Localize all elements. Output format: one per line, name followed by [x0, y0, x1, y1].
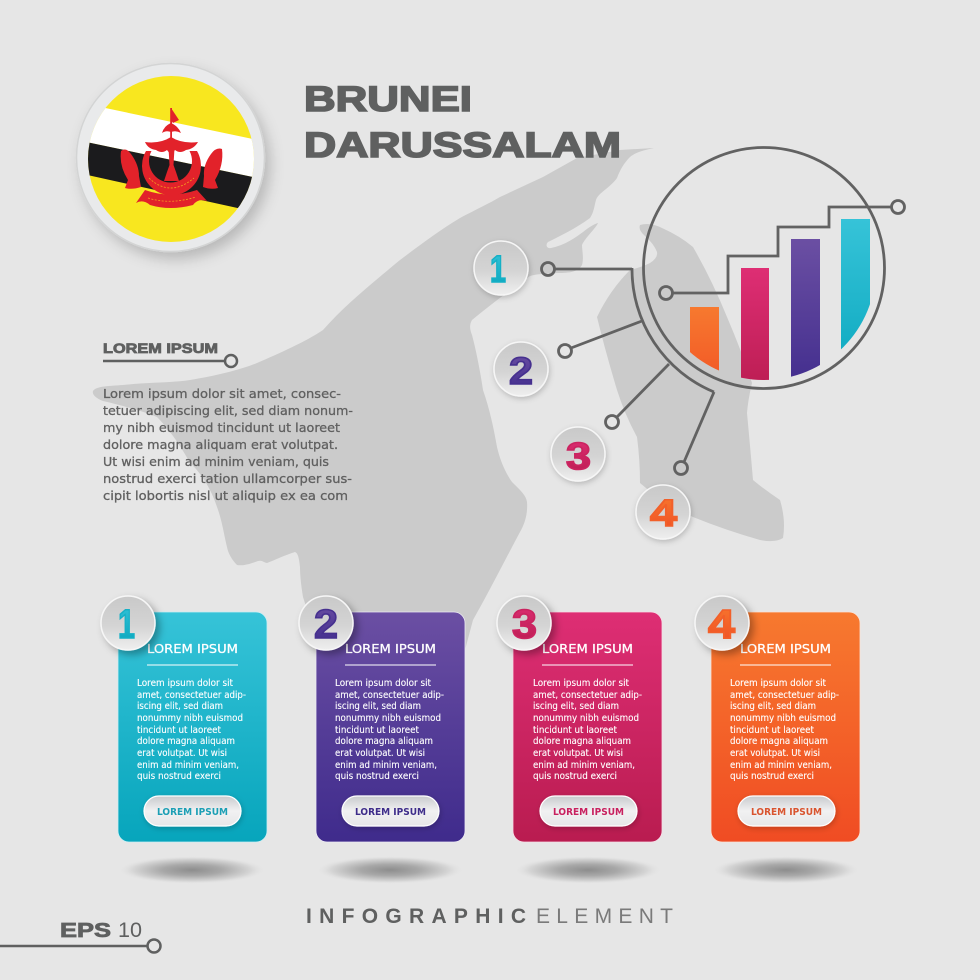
map: Brunei silhouette	[93, 148, 784, 650]
card text: tincidunt ut laoreet	[533, 725, 617, 736]
emblem	[121, 108, 222, 208]
card text: nonummy nibh euismod	[730, 713, 836, 724]
card text: amet, consectetuer adip-	[533, 690, 642, 701]
card text: quis nostrud exerci	[533, 771, 617, 782]
card number badge	[101, 596, 155, 650]
text block: left: dolore magna aliquam erat volutpat.	[103, 438, 338, 453]
flag ring	[76, 64, 264, 252]
card text: Lorem ipsum dolor sit	[533, 678, 629, 689]
card shadow	[118, 856, 266, 884]
card shadow	[712, 856, 860, 884]
card text: dolore magna aliquam	[335, 736, 433, 747]
card text: erat volutpat. Ut wisi	[137, 748, 227, 759]
info heading: left	[103, 340, 237, 367]
card text: quis nostrud exerci	[335, 771, 419, 782]
text block: left: tetuer adipiscing elit, sed diam nonum-	[103, 404, 353, 419]
card button	[144, 796, 241, 826]
footer: infographic element	[306, 905, 673, 928]
card text: tincidunt ut laoreet	[730, 725, 814, 736]
card text: erat volutpat. Ut wisi	[335, 748, 425, 759]
text block: left: cipit lobortis nisl ut aliquip ex ea com	[103, 489, 348, 504]
title: BRUNEI	[304, 80, 472, 119]
card button	[738, 796, 835, 826]
text block: left: nostrud exerci tation ullamcorper sus-	[103, 472, 352, 487]
footer: infographic element: ELEMENT	[536, 905, 673, 928]
card text	[533, 678, 642, 782]
panel: card 3	[497, 596, 662, 884]
card text: iscing elit, sed diam	[730, 701, 816, 712]
card text: Lorem ipsum dolor sit	[335, 678, 431, 689]
card number badge	[695, 596, 749, 650]
card text: dolore magna aliquam	[137, 736, 235, 747]
connector lines	[542, 262, 714, 474]
map badge 4: 4	[650, 493, 677, 535]
card text: Lorem ipsum dolor sit	[730, 678, 826, 689]
card button: LOREM IPSUM	[751, 807, 822, 818]
text block: left	[103, 387, 353, 504]
card number badge	[497, 596, 551, 650]
lens outer arc	[632, 268, 714, 392]
card text: enim ad minim veniam,	[335, 760, 437, 771]
card text: nonummy nibh euismod	[533, 713, 639, 724]
title: DARUSSALAM	[304, 126, 621, 165]
card text: enim ad minim veniam,	[730, 760, 832, 771]
card text: nonummy nibh euismod	[137, 713, 243, 724]
card shadow	[316, 856, 464, 884]
magnifier with bar chart	[632, 148, 904, 407]
card heading: LOREM IPSUM	[345, 642, 436, 656]
stepped trend line	[660, 200, 904, 300]
card text: Lorem ipsum dolor sit	[137, 678, 233, 689]
title	[304, 80, 621, 165]
flag badge	[60, 64, 280, 252]
text block: left: Ut wisi enim ad minim veniam, quis	[103, 455, 329, 470]
card heading: LOREM IPSUM	[542, 642, 633, 656]
footer: infographic element: INFOGRAPHIC	[306, 905, 526, 928]
card text: tincidunt ut laoreet	[137, 725, 221, 736]
card text: erat volutpat. Ut wisi	[730, 748, 820, 759]
card text: amet, consectetuer adip-	[335, 690, 444, 701]
bar chart	[690, 219, 870, 380]
panel: card 4	[695, 596, 860, 884]
text block: left: my nibh euismod tincidunt ut laoreet	[103, 421, 340, 436]
card body	[316, 612, 465, 842]
map badge 3: 3	[566, 436, 591, 478]
card text: amet, consectetuer adip-	[730, 690, 839, 701]
text block: left: Lorem ipsum dolor sit amet, consec-	[103, 387, 341, 402]
panel: card 1	[101, 596, 267, 884]
card text: quis nostrud exerci	[730, 771, 814, 782]
card number badge: 3	[512, 601, 537, 647]
card text: amet, consectetuer adip-	[137, 690, 246, 701]
map badge 2	[494, 342, 548, 396]
card body	[513, 612, 662, 842]
card text: enim ad minim veniam,	[137, 760, 239, 771]
card text: dolore magna aliquam	[533, 736, 631, 747]
lens circle	[644, 148, 884, 388]
footer: EPS 10	[0, 919, 160, 952]
card body	[711, 612, 860, 842]
card text: tincidunt ut laoreet	[335, 725, 419, 736]
card body	[118, 612, 267, 842]
map badge 1: 1	[490, 249, 506, 291]
map badge 4	[636, 485, 690, 539]
card text: dolore magna aliquam	[730, 736, 828, 747]
card number badge: 1	[118, 601, 135, 647]
card button: LOREM IPSUM	[553, 807, 624, 818]
card text: iscing elit, sed diam	[137, 701, 223, 712]
card text	[335, 678, 444, 782]
card heading: LOREM IPSUM	[740, 642, 831, 656]
footer: EPS 10: EPS	[60, 920, 111, 942]
card button: LOREM IPSUM	[355, 807, 426, 818]
card text: iscing elit, sed diam	[335, 701, 421, 712]
card text: nonummy nibh euismod	[335, 713, 441, 724]
card text: enim ad minim veniam,	[533, 760, 635, 771]
flag of Brunei	[88, 76, 254, 242]
map badge 2: 2	[509, 351, 533, 393]
info heading: left: LOREM IPSUM	[103, 340, 218, 356]
card shadow	[514, 856, 662, 884]
footer: EPS 10: 10	[118, 919, 142, 942]
panel: card 2	[299, 596, 465, 884]
card heading: LOREM IPSUM	[147, 642, 238, 656]
card text	[137, 678, 246, 782]
card text: quis nostrud exerci	[137, 771, 221, 782]
card text: erat volutpat. Ut wisi	[533, 748, 623, 759]
map badge 1	[474, 241, 528, 295]
map badge 3	[551, 427, 605, 481]
card number badge: 4	[708, 601, 735, 647]
card button	[540, 796, 637, 826]
card text: iscing elit, sed diam	[533, 701, 619, 712]
card text	[730, 678, 839, 782]
card button	[342, 796, 439, 826]
card button: LOREM IPSUM	[157, 807, 228, 818]
emblem script	[148, 178, 196, 201]
card number badge	[299, 596, 353, 650]
card number badge: 2	[314, 601, 338, 647]
